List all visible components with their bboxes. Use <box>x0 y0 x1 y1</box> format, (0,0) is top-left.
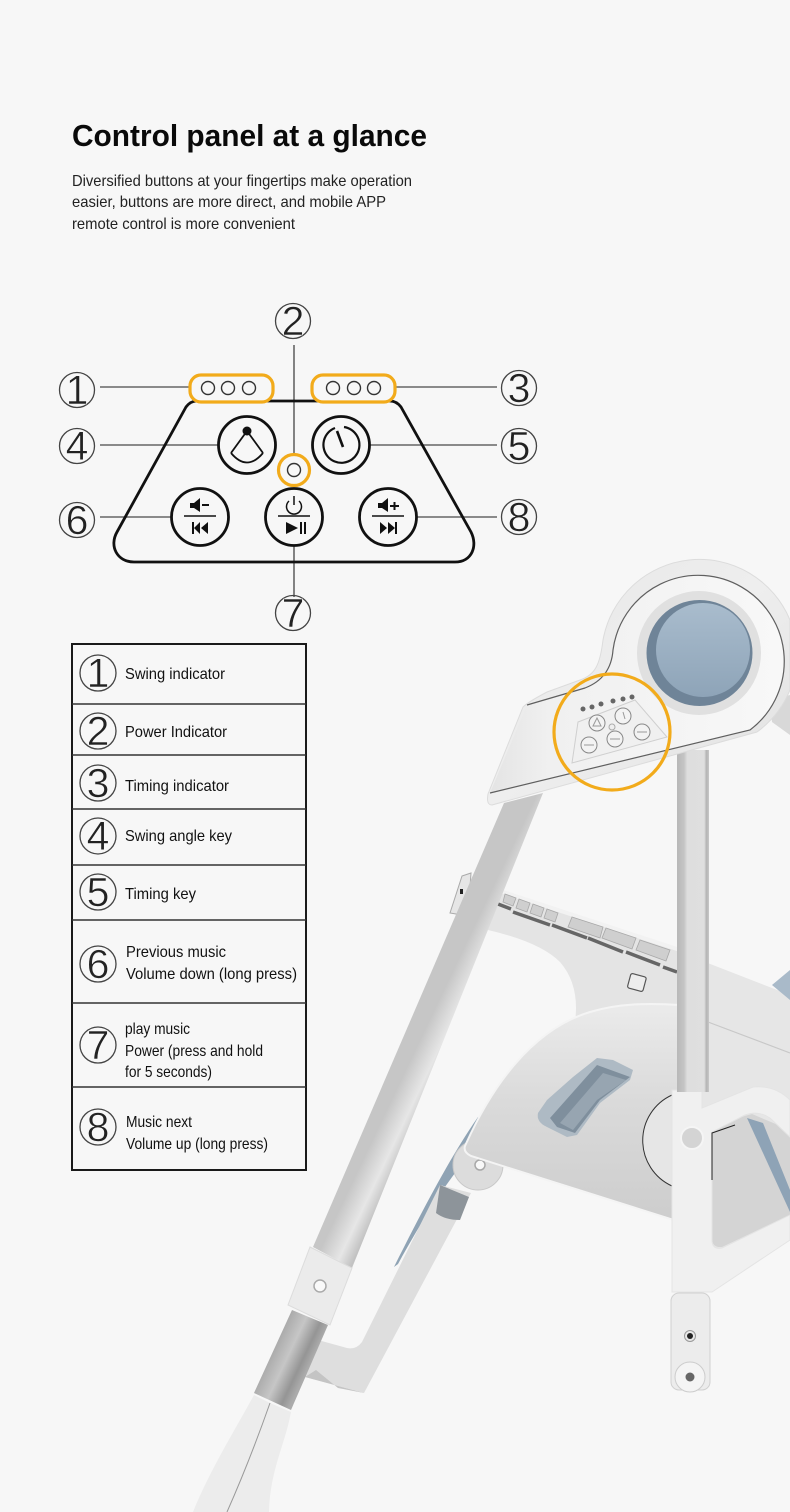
row 7: play music <box>125 1021 190 1038</box>
callout numbers: 2 <box>282 298 304 344</box>
row 4 <box>80 813 232 859</box>
indicator group 3 <box>312 375 395 402</box>
orange highlight circle <box>554 674 670 790</box>
row 4: 4 <box>87 813 109 859</box>
tube collar <box>288 1247 352 1325</box>
blue disc <box>646 600 752 706</box>
title: Control panel at a glance <box>72 118 427 153</box>
callout numbers <box>60 298 536 636</box>
row 7: for 5 seconds) <box>125 1064 212 1081</box>
right body panel <box>700 960 790 1250</box>
callout numbers: 1 <box>66 367 88 413</box>
tube behind head right <box>770 695 790 735</box>
row 7: 7 <box>87 1022 109 1068</box>
intro text: easier, buttons are more direct, and mobile APP <box>72 194 386 211</box>
vent slots <box>498 892 680 972</box>
inner seat area <box>712 1114 790 1247</box>
joint <box>681 1127 703 1149</box>
button: next <box>360 488 416 546</box>
row 3: 3 <box>87 760 109 806</box>
right foot <box>671 1293 710 1392</box>
row 8 <box>80 1104 268 1153</box>
table grid <box>72 644 306 1170</box>
indicator group 1 <box>190 375 273 402</box>
button: swing angle <box>218 416 276 474</box>
L bracket <box>305 1185 471 1393</box>
button: timing <box>312 416 370 474</box>
clip on long tube <box>450 873 471 916</box>
callout numbers: 3 <box>508 365 530 411</box>
leader lines <box>100 345 497 597</box>
row 6: Volume down (long press) <box>126 966 297 983</box>
row 5 <box>80 869 196 915</box>
callout numbers: 5 <box>508 423 530 469</box>
control panel diagram <box>60 298 536 636</box>
row 7 <box>80 1021 263 1081</box>
row 5: 5 <box>87 869 109 915</box>
callout numbers: 8 <box>508 494 530 540</box>
row 2 <box>80 708 228 754</box>
row 2: Power Indicator <box>125 724 228 741</box>
button: power and play <box>266 488 322 546</box>
intro text <box>72 173 412 233</box>
row 6 <box>80 941 297 987</box>
blue strip <box>747 1118 790 1212</box>
row 6: 6 <box>87 941 109 987</box>
row 1: 1 <box>87 650 109 696</box>
row 8: 8 <box>87 1104 109 1150</box>
row 1: Swing indicator <box>125 666 226 683</box>
long tube upper <box>313 793 543 1268</box>
inner housing fill <box>490 575 784 793</box>
long tube lower <box>254 1310 328 1410</box>
product illustration: swing chair <box>193 559 790 1512</box>
mini control panel <box>572 694 667 763</box>
row 3 <box>80 760 230 806</box>
inner seat shadow line <box>712 1125 735 1180</box>
row 4: Swing angle key <box>125 828 232 845</box>
small square button <box>627 973 647 992</box>
row 5: Timing key <box>125 886 196 903</box>
intro text: remote control is more convenient <box>72 216 296 233</box>
callout numbers: 7 <box>282 590 304 636</box>
row 6: Previous music <box>126 944 226 961</box>
legend table <box>72 644 306 1170</box>
row 7: Power (press and hold <box>125 1043 263 1060</box>
pivot <box>453 1140 503 1190</box>
row 8: Volume up (long press) <box>126 1136 268 1153</box>
side fan body <box>465 1004 680 1222</box>
callout numbers: 6 <box>66 497 88 543</box>
row 2: 2 <box>87 708 109 754</box>
base foot <box>193 1395 291 1512</box>
seam line <box>490 575 784 793</box>
upper bracket <box>488 892 680 1022</box>
intro text: Diversified buttons at your fingertips make operation <box>72 173 412 190</box>
button: previous <box>172 488 228 546</box>
right vertical tube <box>677 750 709 1092</box>
blue seat corner <box>772 970 790 1000</box>
motor ring <box>637 591 761 715</box>
rear frame <box>672 1087 790 1292</box>
callout numbers: 4 <box>66 423 88 469</box>
row 1 <box>80 650 226 696</box>
power indicator <box>278 454 310 486</box>
head housing <box>488 559 790 805</box>
handle recess <box>538 1058 633 1137</box>
row 3: Timing indicator <box>125 778 230 795</box>
row 8: Music next <box>126 1114 192 1131</box>
blue seat sliver <box>394 1117 490 1267</box>
panel outline <box>114 401 474 562</box>
hub disc <box>643 1095 672 1186</box>
